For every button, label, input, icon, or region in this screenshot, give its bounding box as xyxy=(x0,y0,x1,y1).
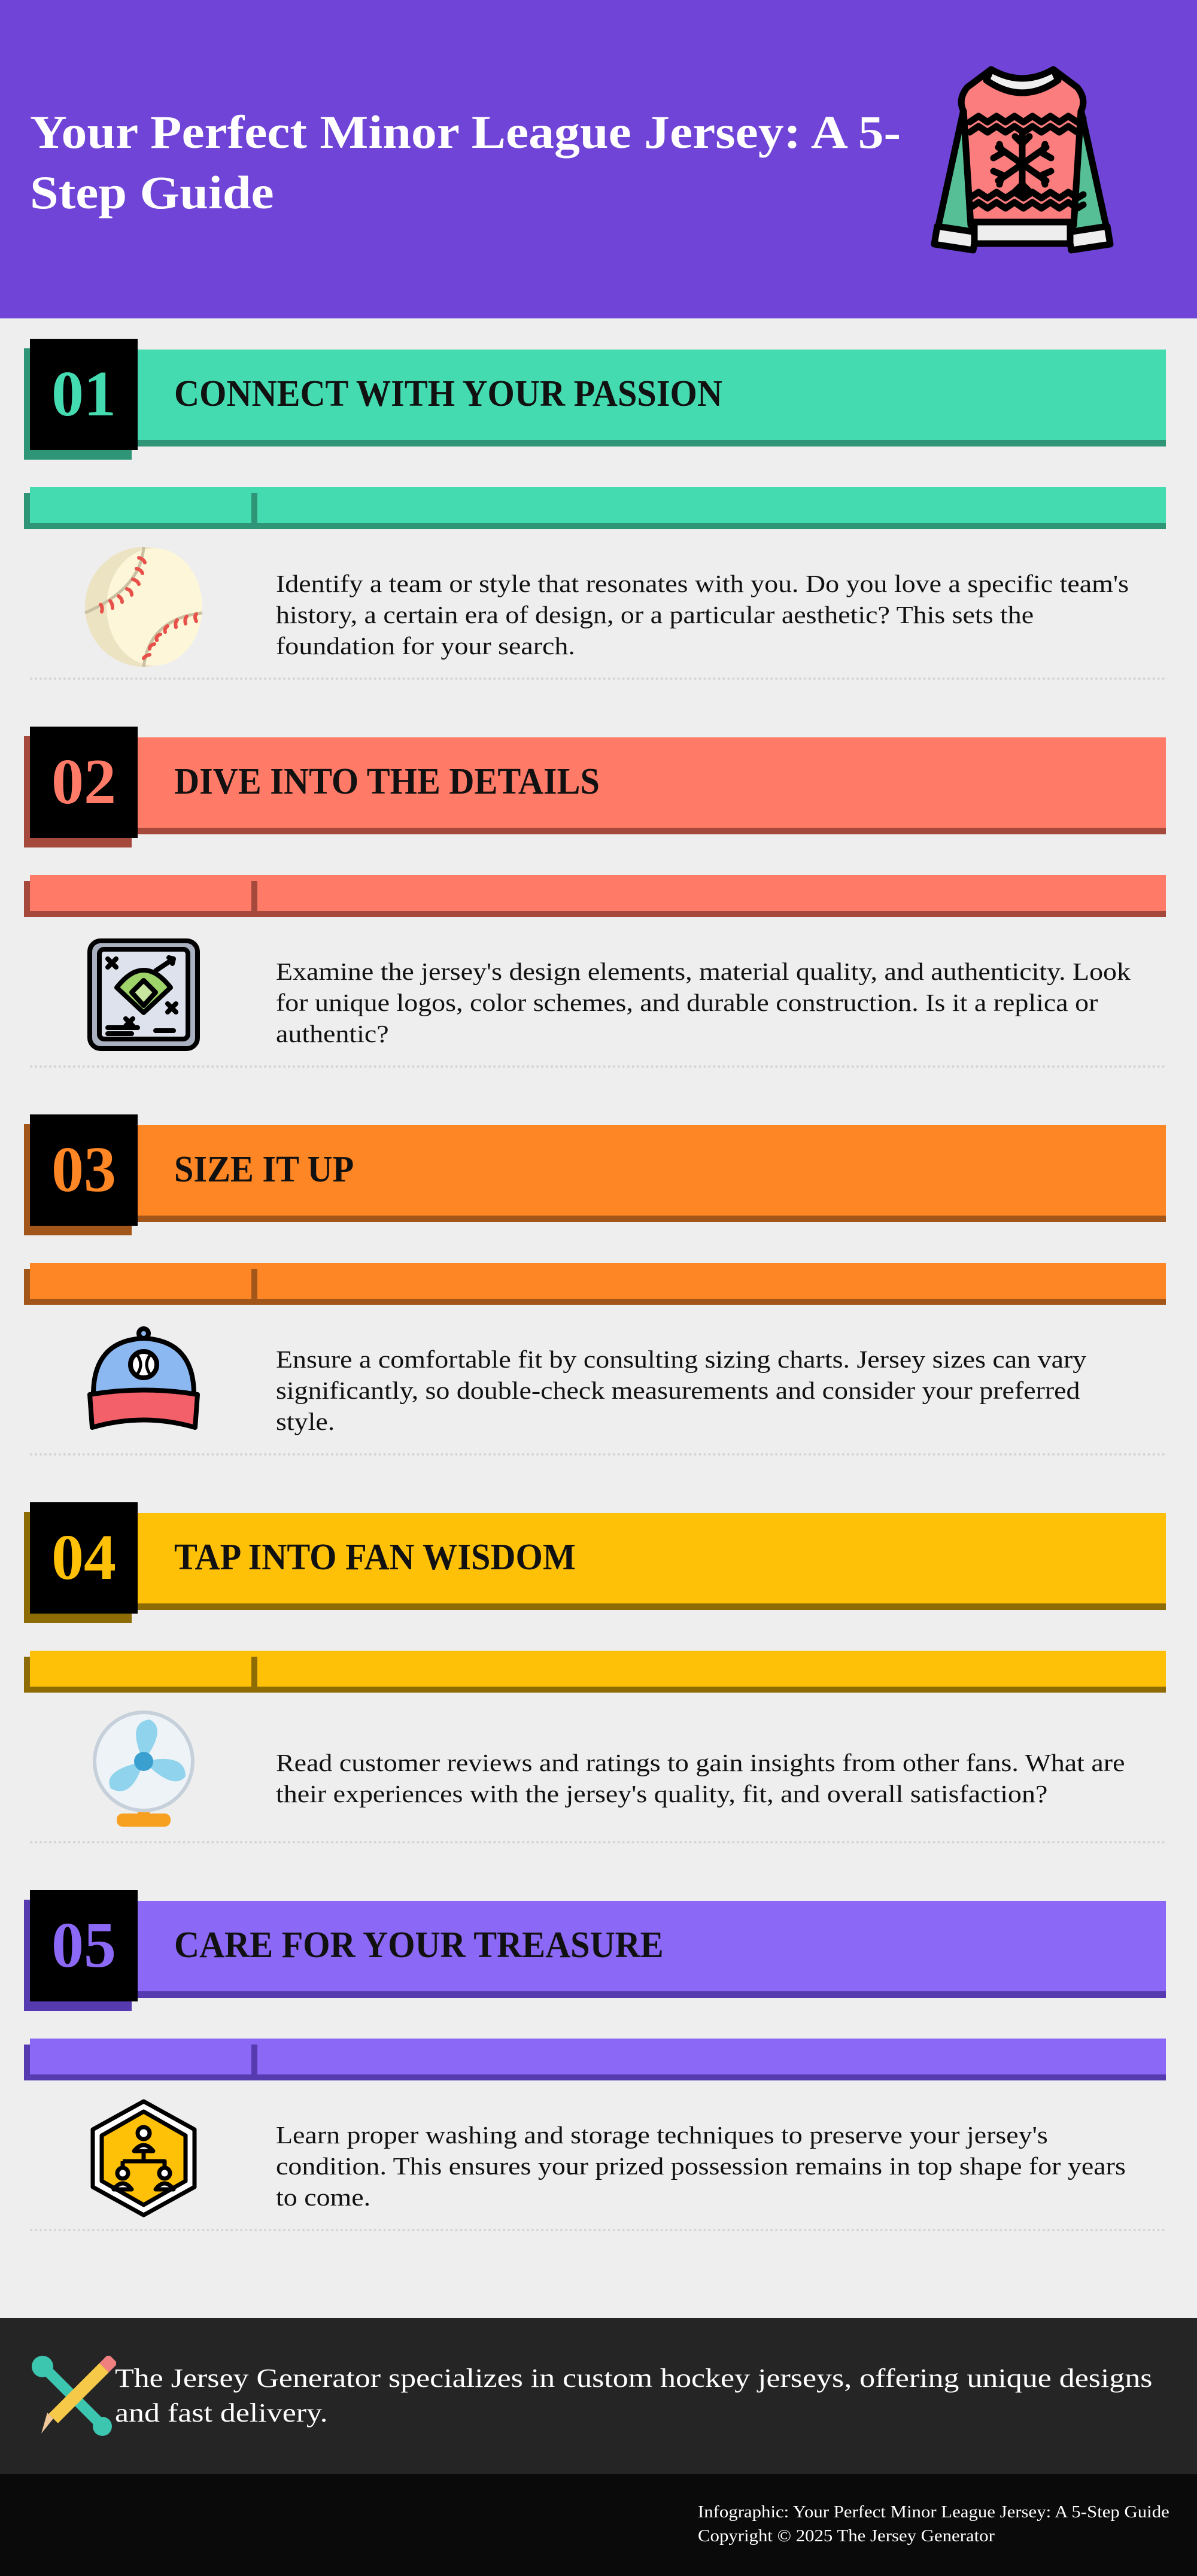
title xyxy=(30,106,901,218)
icon: fan xyxy=(93,1711,195,1827)
description xyxy=(276,958,1131,1047)
description: Learn proper washing and storage techniques to preserve your jersey's xyxy=(276,2121,1048,2149)
description: authentic? xyxy=(276,1020,389,1047)
footer xyxy=(0,2318,1197,2474)
icon: hexagon org xyxy=(91,2100,196,2217)
step 5 xyxy=(24,1890,1166,2231)
title: Step Guide xyxy=(30,166,274,218)
number badge xyxy=(30,1890,138,2001)
step 3 xyxy=(24,1114,1166,1456)
description: history, a certain era of design, or a particular aesthetic? This sets the xyxy=(276,601,1034,628)
heading: SIZE IT UP xyxy=(174,1149,354,1190)
description: condition. This ensures your prized possession remains in top shape for years xyxy=(276,2152,1126,2180)
description xyxy=(276,2121,1126,2211)
step 1 xyxy=(24,339,1166,680)
number badge: 01 xyxy=(51,359,116,430)
footer text: The Jersey Generator specializes in custom hockey jerseys, offering unique designs xyxy=(115,2364,1152,2393)
header xyxy=(0,0,1197,318)
description: significantly, so double-check measurements and consider your preferred xyxy=(276,1377,1080,1404)
number badge: 02 xyxy=(51,746,116,818)
title: Your Perfect Minor League Jersey: A 5- xyxy=(30,106,901,158)
icon: field plan xyxy=(87,938,200,1051)
heading: DIVE INTO THE DETAILS xyxy=(174,761,600,802)
number badge: 04 xyxy=(51,1522,116,1593)
description: Read customer reviews and ratings to gain insights from other fans. What are xyxy=(276,1749,1125,1776)
heading: TAP INTO FAN WISDOM xyxy=(174,1537,576,1578)
number badge xyxy=(30,727,138,838)
icon: sweater xyxy=(931,66,1113,254)
heading: CONNECT WITH YOUR PASSION xyxy=(174,373,722,414)
description xyxy=(276,1749,1125,1808)
description: their experiences with the jersey's quality, fit, and overall satisfaction? xyxy=(276,1780,1047,1808)
number badge: 05 xyxy=(51,1910,116,1981)
step 4 xyxy=(24,1502,1166,1843)
copyright: Infographic: Your Perfect Minor League Jersey: A 5-Step Guide xyxy=(698,2503,1169,2522)
copyright xyxy=(0,2474,1197,2576)
icon: cap xyxy=(87,1326,200,1430)
number badge: 03 xyxy=(51,1134,116,1205)
description: Identify a team or style that resonates with you. Do you love a specific team's xyxy=(276,570,1129,597)
description: to come. xyxy=(276,2183,370,2211)
footer text: and fast delivery. xyxy=(115,2398,328,2428)
footer text xyxy=(115,2364,1152,2428)
step 2 xyxy=(24,727,1166,1068)
description: Examine the jersey's design elements, material quality, and authenticity. Look xyxy=(276,958,1131,985)
description xyxy=(276,1345,1087,1435)
description: for unique logos, color schemes, and durable construction. Is it a replica or xyxy=(276,989,1098,1016)
description: Ensure a comfortable fit by consulting sizing charts. Jersey sizes can vary xyxy=(276,1345,1086,1373)
icon: tools xyxy=(32,2356,116,2436)
description xyxy=(276,570,1129,660)
description: foundation for your search. xyxy=(276,632,575,660)
heading: CARE FOR YOUR TREASURE xyxy=(174,1925,664,1966)
number badge xyxy=(30,1502,138,1614)
icon: baseball xyxy=(84,547,202,667)
description: style. xyxy=(276,1408,335,1435)
number badge xyxy=(30,1114,138,1226)
number badge xyxy=(30,339,138,450)
copyright: Copyright © 2025 The Jersey Generator xyxy=(698,2527,995,2545)
